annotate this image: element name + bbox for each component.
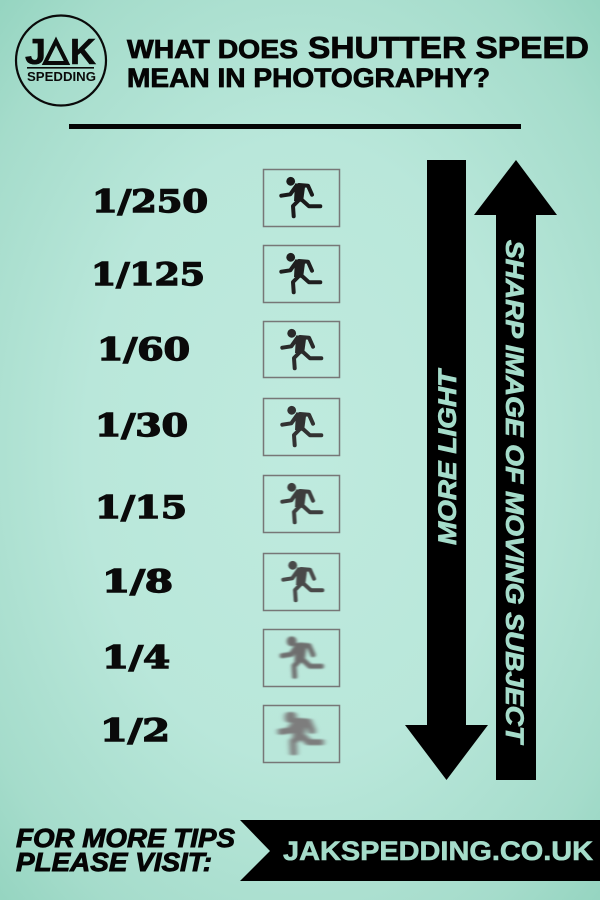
shutter speed labels: 1/60 <box>97 332 190 368</box>
logo: Jak Spedding <box>16 16 106 106</box>
arrow: sharp image of moving subject: SHARP IMAGE OF MOVING SUBJECT <box>500 240 528 746</box>
logo: Jak Spedding: J <box>25 31 46 72</box>
shutter speed labels: 1/4 <box>102 640 170 676</box>
shutter speed labels <box>91 184 208 749</box>
shutter speed labels: 1/2 <box>100 713 170 749</box>
title: SHUTTER SPEED <box>308 30 589 65</box>
arrow: more light <box>405 160 488 780</box>
shutter speed labels: 1/8 <box>102 564 173 600</box>
footer banner with url <box>240 820 600 881</box>
footer banner with url: JAKSPEDDING.CO.UK <box>283 836 594 866</box>
footer call to action <box>16 823 236 877</box>
footer call to action: PLEASE VISIT: <box>16 847 212 877</box>
shutter speed labels: 1/15 <box>95 490 187 526</box>
logo: Jak Spedding: K <box>70 31 96 72</box>
footer call to action: FOR MORE TIPS <box>16 823 236 853</box>
title <box>127 30 589 93</box>
logo: Jak Spedding: SPEDDING <box>27 70 96 84</box>
shutter speed labels: 1/30 <box>95 408 188 444</box>
running figure frames, sharp to blurred <box>264 170 340 762</box>
arrow: sharp image of moving subject <box>474 160 557 780</box>
title: MEAN IN PHOTOGRAPHY? <box>127 63 490 93</box>
shutter speed labels: 1/250 <box>92 184 208 220</box>
arrow: more light: MORE LIGHT <box>434 367 462 545</box>
title: WHAT DOES <box>127 34 298 64</box>
shutter speed labels: 1/125 <box>91 257 205 293</box>
